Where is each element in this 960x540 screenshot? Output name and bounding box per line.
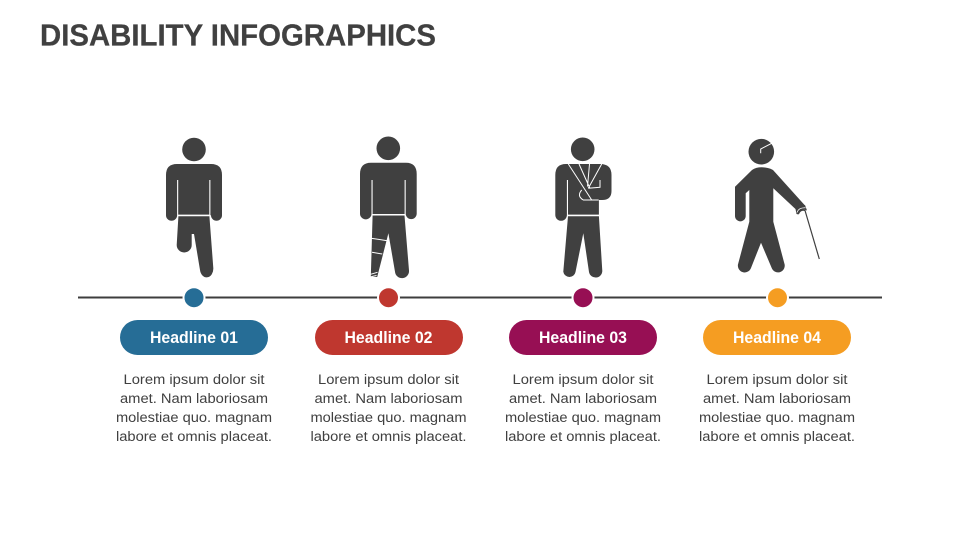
text block 3: labore et omnis placeat. bbox=[505, 429, 661, 445]
text block 3: amet. Nam laboriosam bbox=[509, 391, 657, 407]
text block 3 bbox=[505, 372, 661, 445]
text block 2: labore et omnis placeat. bbox=[310, 429, 466, 445]
text block 3: Lorem ipsum dolor sit bbox=[512, 372, 654, 388]
headline pill 3: Headline 03 bbox=[539, 329, 627, 347]
text block 2 bbox=[310, 372, 466, 445]
headline pill 3 bbox=[509, 320, 657, 355]
text block 2: Lorem ipsum dolor sit bbox=[318, 372, 459, 388]
text block 1 bbox=[116, 372, 272, 445]
text block 4: Lorem ipsum dolor sit bbox=[706, 372, 848, 388]
icon: person with missing lower leg bbox=[166, 138, 222, 277]
text block 3: molestiae quo. magnam bbox=[505, 410, 661, 426]
icon: person with bandaged leg bbox=[360, 136, 417, 278]
headline pill 4 bbox=[703, 320, 851, 355]
marker dot 4 bbox=[767, 287, 788, 308]
text block 4: molestiae quo. magnam bbox=[699, 410, 855, 426]
text block 2: molestiae quo. magnam bbox=[310, 410, 466, 426]
text block 1: labore et omnis placeat. bbox=[116, 429, 272, 445]
headline pill 2 bbox=[315, 320, 463, 355]
icon: person with arm sling bbox=[555, 138, 612, 278]
marker dot 2 bbox=[378, 287, 399, 308]
text block 4 bbox=[699, 372, 855, 445]
timeline line bbox=[78, 296, 882, 298]
headline pill 1: Headline 01 bbox=[150, 329, 238, 347]
text block 2: amet. Nam laboriosam bbox=[314, 391, 462, 407]
headline pill 1 bbox=[120, 320, 268, 355]
headline pill 4: Headline 04 bbox=[733, 329, 822, 347]
headline pill 2: Headline 02 bbox=[344, 329, 432, 347]
icon: elderly person with cane bbox=[735, 139, 819, 272]
title: DISABILITY INFOGRAPHICS bbox=[40, 18, 436, 52]
marker dot 3 bbox=[572, 287, 594, 308]
text block 4: amet. Nam laboriosam bbox=[703, 391, 851, 407]
marker dot 1 bbox=[184, 287, 204, 308]
text block 4: labore et omnis placeat. bbox=[699, 429, 855, 445]
text block 1: Lorem ipsum dolor sit bbox=[124, 372, 265, 388]
text block 1: molestiae quo. magnam bbox=[116, 410, 272, 426]
text block 1: amet. Nam laboriosam bbox=[120, 391, 268, 407]
